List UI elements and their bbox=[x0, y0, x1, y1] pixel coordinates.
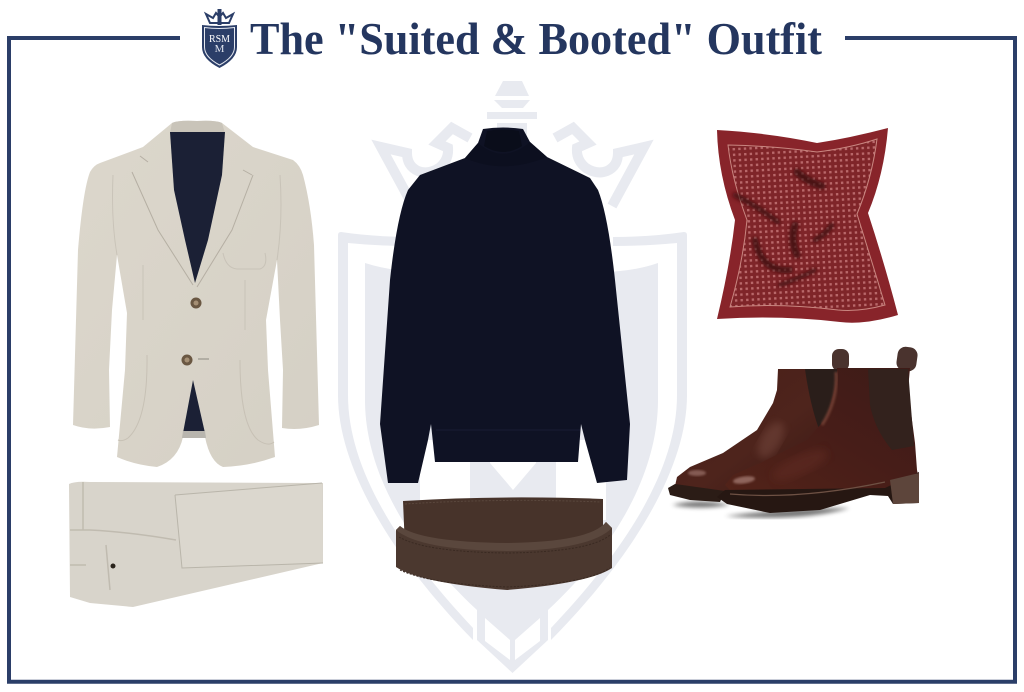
watermark shield fill bbox=[365, 263, 658, 610]
watermark finial bbox=[487, 81, 537, 140]
watermark shield band bbox=[338, 232, 687, 640]
watermark crown right bbox=[555, 128, 644, 206]
jacket bbox=[73, 121, 319, 467]
logo crest bbox=[202, 9, 237, 68]
watermark shield bbox=[338, 81, 687, 673]
watermark M letter bbox=[420, 440, 606, 520]
watermark chevron bbox=[477, 600, 548, 673]
title: The "Suited & Booted" Outfit bbox=[250, 14, 822, 64]
chelsea boots bbox=[668, 346, 919, 518]
boot shadows bbox=[672, 502, 850, 518]
belt bbox=[396, 497, 612, 590]
turtleneck sweater bbox=[380, 128, 630, 483]
back boot bbox=[832, 349, 849, 371]
pocket square bbox=[717, 128, 898, 323]
logo crest: M bbox=[215, 43, 225, 55]
trousers bbox=[69, 482, 323, 607]
logo crest: RSM bbox=[209, 33, 230, 45]
watermark crown left bbox=[381, 128, 470, 206]
front boot bbox=[895, 346, 919, 372]
